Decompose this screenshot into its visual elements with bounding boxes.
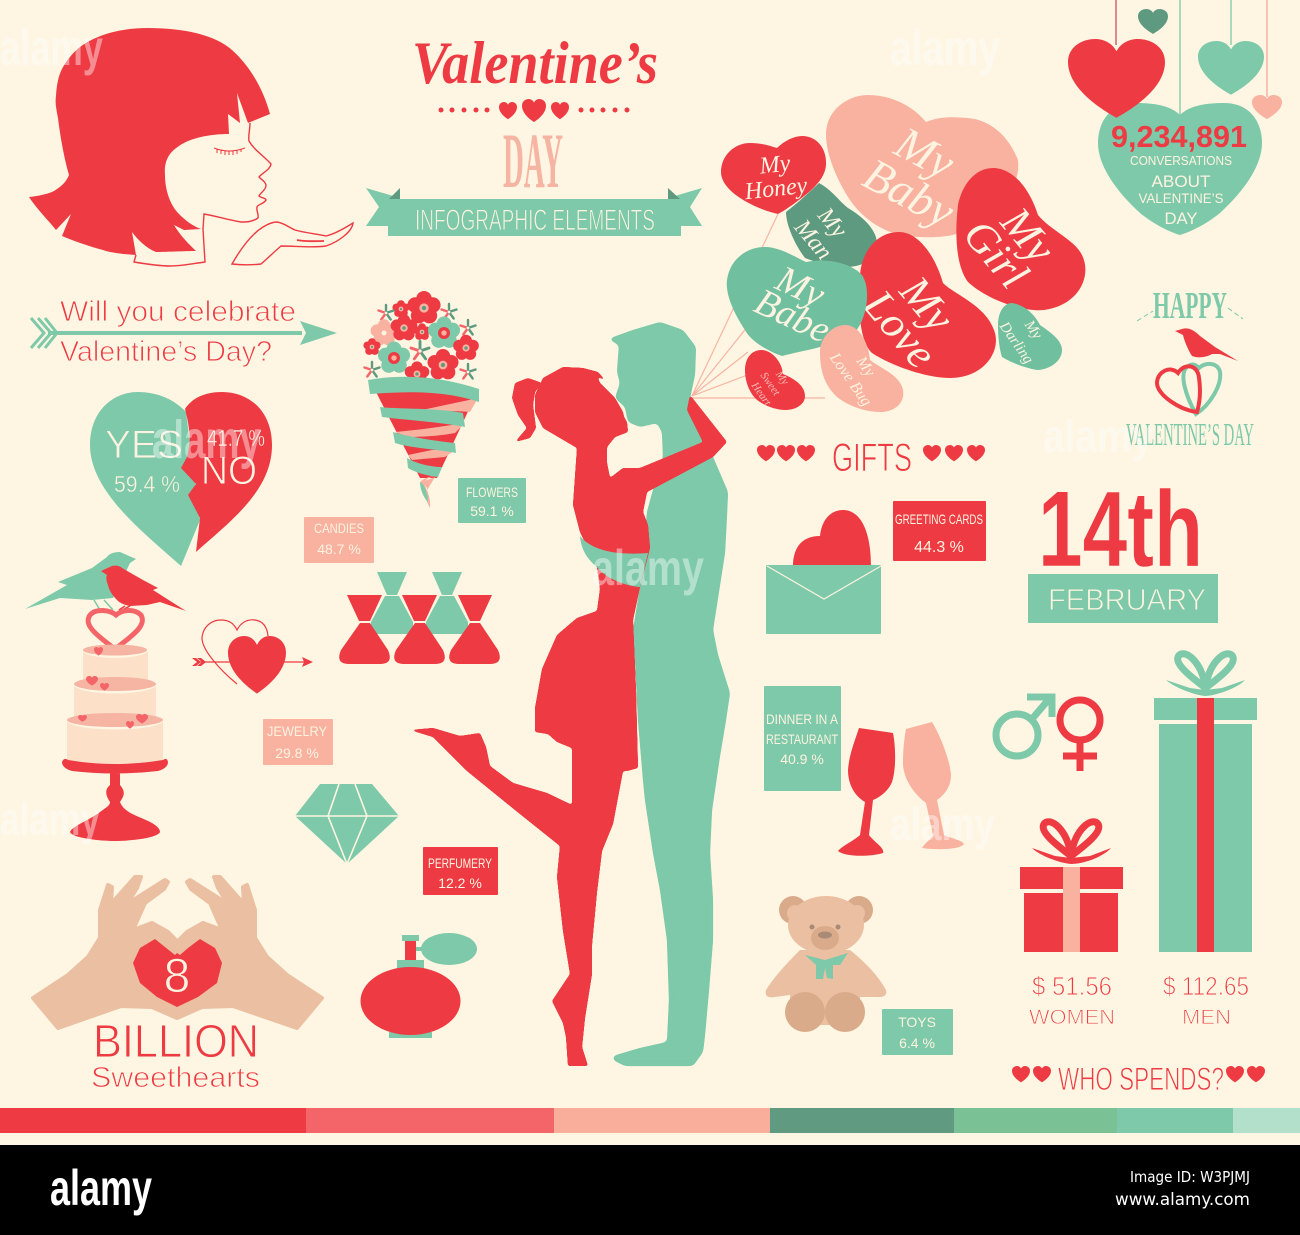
balloon: my girl: My <box>991 197 1065 273</box>
balloon: my man: Man <box>788 214 837 265</box>
pie heart: yes / no <box>90 392 272 566</box>
balloon: my darling: My <box>1020 317 1045 343</box>
title: Valentine’s <box>412 30 658 96</box>
illustration: birds on wedding cake <box>25 552 186 841</box>
birds <box>25 552 186 612</box>
watermark: alamy <box>0 793 100 845</box>
illustration: hands forming a heart with 8 billion sweethearts: BILLION <box>93 1015 259 1067</box>
title <box>412 30 658 204</box>
label: dinner: 40.9 % <box>780 751 824 767</box>
label: candies: CANDIES <box>314 520 364 536</box>
conversations heart: DAY <box>1164 209 1198 228</box>
label: toys <box>882 1009 953 1055</box>
footer bar: Image ID: W3PJMJ <box>1130 1168 1250 1186</box>
balloon: my man: My <box>812 202 852 243</box>
label: perfumery <box>423 847 498 895</box>
label: candies: 48.7 % <box>317 541 361 557</box>
ribbon: infographic elements <box>366 188 702 237</box>
illustration: hands forming a heart with 8 billion sweethearts: 8 <box>164 950 190 1003</box>
watermark <box>0 20 1153 850</box>
watermark: alamy <box>890 798 995 850</box>
illustration: teddy bear <box>766 896 886 1032</box>
balloon: my sweet heart <box>745 350 805 410</box>
watermark: alamy <box>1043 410 1153 462</box>
date: 14th february <box>1028 468 1218 623</box>
label: perfumery: PERFUMERY <box>428 855 492 871</box>
balloon: my darling <box>995 303 1062 370</box>
balloon: my honey: My <box>757 150 792 180</box>
balloon: my sweet heart: Heart <box>748 379 774 409</box>
title divider: dots and hearts <box>438 99 630 122</box>
illustration: envelope with heart <box>766 510 881 634</box>
label: greeting cards: GREETING CARDS <box>895 511 983 527</box>
balloon: my honey <box>721 136 826 214</box>
date: 14th february: FEBRUARY <box>1048 582 1206 617</box>
heading: gifts <box>757 436 985 480</box>
man silhouette <box>608 322 730 1066</box>
label: candies <box>304 517 374 563</box>
heart topper <box>88 610 142 649</box>
watermark: alamy <box>0 20 103 76</box>
conversations heart: VALENTINE’S <box>1138 191 1224 206</box>
badge: happy valentine's day: HAPPY <box>1153 285 1227 327</box>
label: greeting cards <box>893 501 986 561</box>
illustration: kissing couple <box>410 322 730 1066</box>
label: perfumery: 12.2 % <box>438 875 482 891</box>
man arm around waist <box>580 536 648 587</box>
balloon: my baby: Baby <box>855 148 963 238</box>
label: jewelry <box>263 719 333 765</box>
spend figures: $ 112.65 <box>1163 971 1249 1001</box>
color stripe <box>0 1108 1300 1133</box>
balloon: my love bug <box>820 325 903 412</box>
footer bar: alamy <box>50 1160 152 1216</box>
pie heart: yes / no: 59.4 % <box>114 471 180 497</box>
label: dinner: RESTAURANT <box>766 731 838 747</box>
illustration: balloon strings <box>692 214 825 398</box>
balloon: my baby <box>826 95 1018 238</box>
balloon: my love <box>853 232 996 378</box>
spend figures: WOMEN <box>1029 1006 1115 1029</box>
illustration: hearts with arrow <box>192 620 313 694</box>
conversations heart: CONVERSATIONS <box>1130 154 1232 168</box>
illustration: hands forming a heart with 8 billion sweethearts <box>33 877 322 1094</box>
badge: happy valentine's day <box>1126 285 1254 452</box>
title: DAY <box>503 117 563 204</box>
balloon: my girl: Girl <box>954 210 1038 298</box>
footer bar: www.alamy.com <box>1115 1190 1250 1210</box>
conversations heart <box>1098 103 1262 235</box>
balloon: my love: Love <box>853 280 946 378</box>
conversations heart: 9,234,891 <box>1111 119 1247 154</box>
label: toys: TOYS <box>898 1014 936 1030</box>
watermark: alamy <box>592 540 704 596</box>
question with arrow: Will you celebrate <box>60 296 296 328</box>
label: dinner: DINNER IN A <box>766 711 839 727</box>
heading: who spends: WHO SPENDS? <box>1058 1061 1224 1097</box>
bouquet <box>363 291 479 508</box>
balloon: my love bug: My <box>852 353 879 381</box>
spend figures: $ 51.56 <box>1032 971 1112 1001</box>
pie heart: yes / no: NO <box>201 449 257 493</box>
bar: men gift <box>1154 654 1257 952</box>
bar: women gift <box>1020 822 1123 952</box>
balloon: my babe: My <box>769 257 831 316</box>
balloon: my love: My <box>890 266 964 342</box>
question with arrow <box>31 296 337 368</box>
balloon: my darling: Darling <box>995 318 1036 367</box>
label: dinner <box>764 686 841 791</box>
label: flowers <box>458 478 526 523</box>
label: jewelry: JEWELRY <box>267 723 328 739</box>
illustration: perfume bottle <box>360 933 477 1038</box>
ribbon: infographic elements: INFOGRAPHIC ELEMENTS <box>415 204 655 237</box>
watermark: alamy <box>152 410 261 470</box>
girl silhouette <box>410 367 727 1066</box>
illustration: candies <box>339 572 500 664</box>
balloon: my babe: Babe <box>748 281 837 352</box>
label: toys: 6.4 % <box>899 1035 935 1051</box>
balloon hearts <box>721 95 1085 412</box>
cake tiers <box>83 644 147 656</box>
illustration: wine glasses <box>838 722 964 856</box>
conversations heart: ABOUT <box>1152 172 1210 191</box>
balloon: my girl <box>954 168 1085 310</box>
pie heart: yes / no: 41.7 % <box>207 425 265 451</box>
cake stand <box>62 759 168 841</box>
icon: male and female symbols <box>996 697 1100 771</box>
date: 14th february: 14th <box>1038 468 1203 589</box>
label: flowers: 59.1 % <box>470 503 514 519</box>
illustration: diamond <box>295 784 399 864</box>
balloon: my sweet heart: Sweet <box>758 370 783 399</box>
footer bar <box>0 1145 1300 1235</box>
balloon: my babe <box>727 247 867 356</box>
balloon: my baby: My <box>886 116 964 189</box>
question with arrow: Valentine’s Day? <box>60 336 272 368</box>
heading: gifts: GIFTS <box>832 436 912 480</box>
illustration: hands forming a heart with 8 billion sweethearts: Sweethearts <box>91 1062 260 1094</box>
pie heart: yes / no: YES <box>105 423 183 467</box>
balloon: my man <box>786 183 877 267</box>
balloon: my sweet heart: My <box>772 368 791 387</box>
illustration: girl blowing a kiss <box>29 28 353 266</box>
girl ponytail <box>512 378 542 442</box>
label: flowers: FLOWERS <box>466 484 518 500</box>
spend figures <box>1029 971 1249 1029</box>
balloon: my honey: Honey <box>742 173 809 205</box>
label: jewelry: 29.8 % <box>275 745 319 761</box>
watermark: alamy <box>890 20 1000 76</box>
spend figures: MEN <box>1182 1006 1231 1029</box>
label: greeting cards: 44.3 % <box>914 539 964 556</box>
hanging hearts <box>1068 0 1282 235</box>
balloon: my love bug: Love Bug <box>825 349 875 410</box>
